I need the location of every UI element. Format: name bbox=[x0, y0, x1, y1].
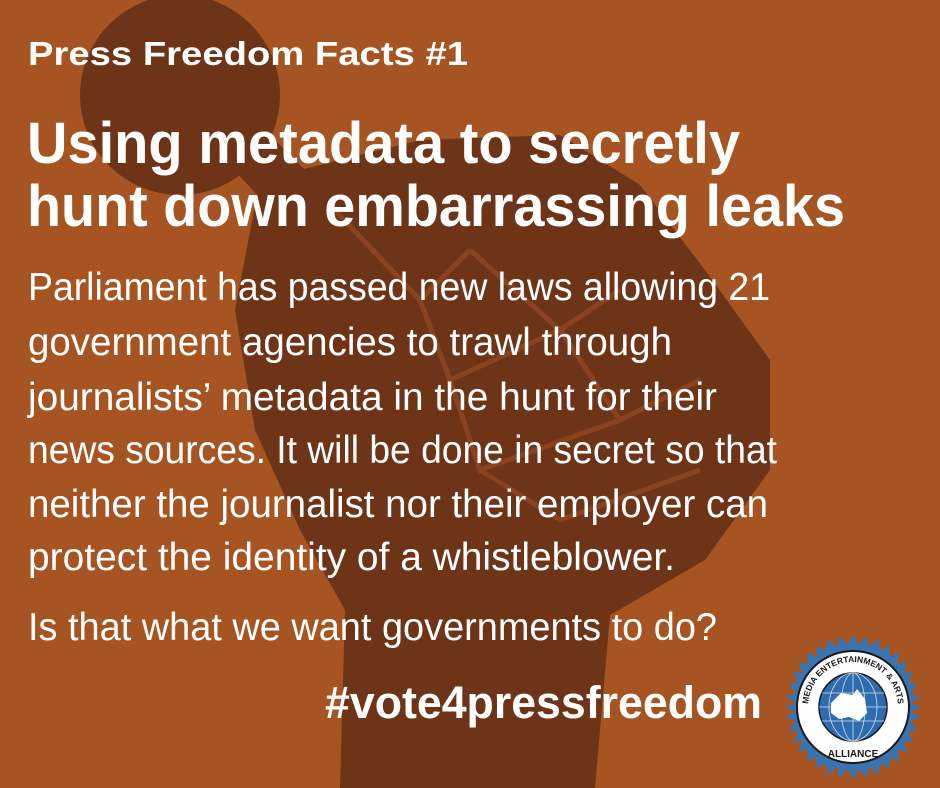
body text: news sources. It will be done in secret so that bbox=[28, 429, 777, 472]
icon: fist with microphone silhouette bbox=[80, 0, 770, 788]
logo: MEAA seal: MEDIA ENTERTAINMENT & ARTS bbox=[802, 656, 904, 704]
hashtag: #vote4pressfreedom bbox=[325, 677, 762, 728]
body text bbox=[27, 266, 777, 579]
logo: MEAA seal bbox=[785, 635, 921, 779]
body text: protect the identity of a whistleblower. bbox=[28, 536, 675, 579]
logo: MEAA seal: ALLIANCE bbox=[828, 749, 879, 760]
body text: government agencies to trawl through bbox=[28, 321, 672, 364]
headline bbox=[27, 111, 845, 239]
body text: Parliament has passed new laws allowing 21 bbox=[28, 266, 770, 309]
question: Is that what we want governments to do? bbox=[28, 606, 717, 649]
body text: neither the journalist nor their employer can bbox=[28, 483, 768, 526]
body text: journalists’ metadata in the hunt for their bbox=[27, 376, 717, 419]
title: Press Freedom Facts #1 bbox=[28, 35, 468, 72]
finger separations bbox=[330, 205, 700, 520]
headline: Using metadata to secretly bbox=[27, 111, 740, 176]
headline: hunt down embarrassing leaks bbox=[27, 174, 845, 239]
